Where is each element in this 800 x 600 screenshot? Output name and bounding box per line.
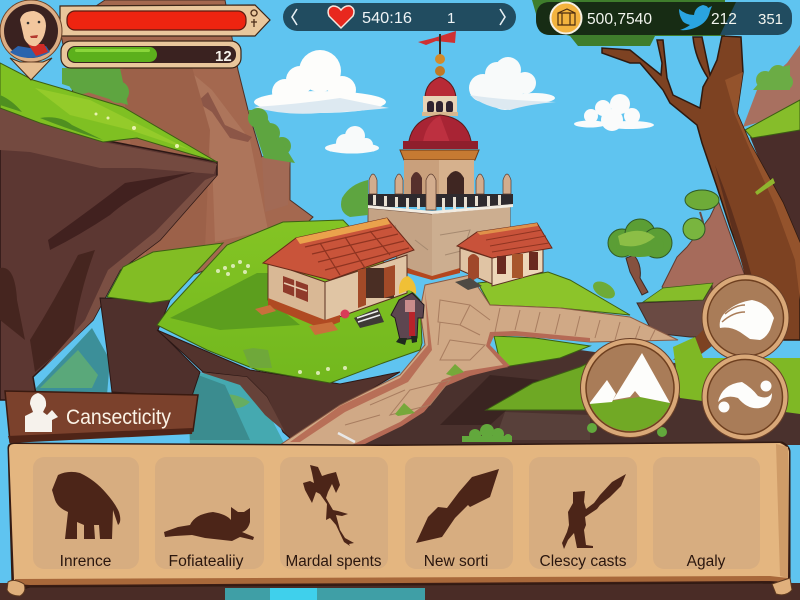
right rock mass: [340, 350, 800, 445]
icon: bear: [52, 472, 120, 539]
card: Clescy casts: [529, 457, 637, 570]
health bar: [60, 5, 270, 36]
arrows: [292, 9, 505, 25]
tree canopy: [532, 0, 725, 46]
button: mountain: [580, 338, 680, 440]
icon: gold coin: [550, 2, 582, 34]
left cliff grass: [0, 63, 217, 162]
icon: key: [251, 10, 257, 27]
card: Fofiatealiiy: [155, 457, 264, 570]
energy bar: [61, 41, 241, 68]
label: Clescy casts: [540, 553, 627, 570]
green bush behind tower: [341, 180, 368, 217]
right grass terraces: [478, 272, 800, 414]
back cliff: [60, 0, 313, 290]
battlements: [367, 194, 513, 207]
card: New sorti: [405, 457, 513, 570]
resource bar: [536, 2, 792, 35]
icon: cat: [164, 507, 254, 541]
label: Mardal spents: [286, 553, 382, 570]
label: Agaly: [687, 553, 726, 570]
top navigation pill: [283, 3, 516, 31]
card: Mardal spents: [280, 457, 388, 570]
timer text: 540:16: [362, 10, 412, 27]
label: New sorti: [424, 553, 488, 570]
stone base: [368, 207, 510, 279]
icon: bust: [25, 393, 58, 432]
label: Cansecticity: [66, 406, 171, 429]
character: [391, 276, 424, 345]
central island rock: [100, 298, 400, 438]
counter text: 1: [447, 10, 455, 27]
icon: swordsman: [562, 474, 626, 549]
bird value: 212: [711, 11, 737, 28]
parchment panel: [7, 442, 792, 596]
card: Inrence: [33, 457, 139, 570]
stone path: [280, 275, 678, 445]
left house: [255, 218, 414, 335]
distant trees: [590, 190, 719, 302]
button: wave: [702, 354, 788, 440]
icon: spear: [416, 469, 499, 543]
icon: axe: [303, 465, 354, 546]
large tree: [602, 36, 800, 360]
button: lion: [702, 274, 789, 362]
label: Inrence: [60, 553, 111, 570]
coin value: 500,7540: [587, 11, 652, 28]
bottom strip below panel: [0, 583, 800, 600]
icon: bird: [679, 5, 712, 30]
drum: [404, 160, 439, 202]
bushes: [462, 423, 667, 442]
scroll curl left: [7, 580, 25, 596]
energy value: 12: [215, 48, 232, 65]
wooden sign: Cansecticity: [5, 391, 198, 443]
green bushes on cliff: [62, 66, 295, 163]
clouds: [254, 50, 654, 154]
left overhanging cliff: [0, 105, 217, 400]
far right rocks: [637, 45, 800, 337]
water far below: [36, 328, 285, 445]
label: Fofiatealiiy: [168, 553, 244, 570]
scroll curl right: [772, 578, 792, 595]
main dome: [408, 115, 472, 148]
main island grass: [107, 220, 422, 383]
card: Agaly: [653, 457, 760, 570]
right house: [455, 223, 552, 290]
player portrait: [0, 0, 62, 80]
extra value: 351: [758, 11, 783, 28]
icon: heart: [328, 6, 354, 28]
tower with red domes: [341, 31, 513, 280]
upper dome: [425, 77, 456, 97]
flag: [418, 31, 456, 45]
